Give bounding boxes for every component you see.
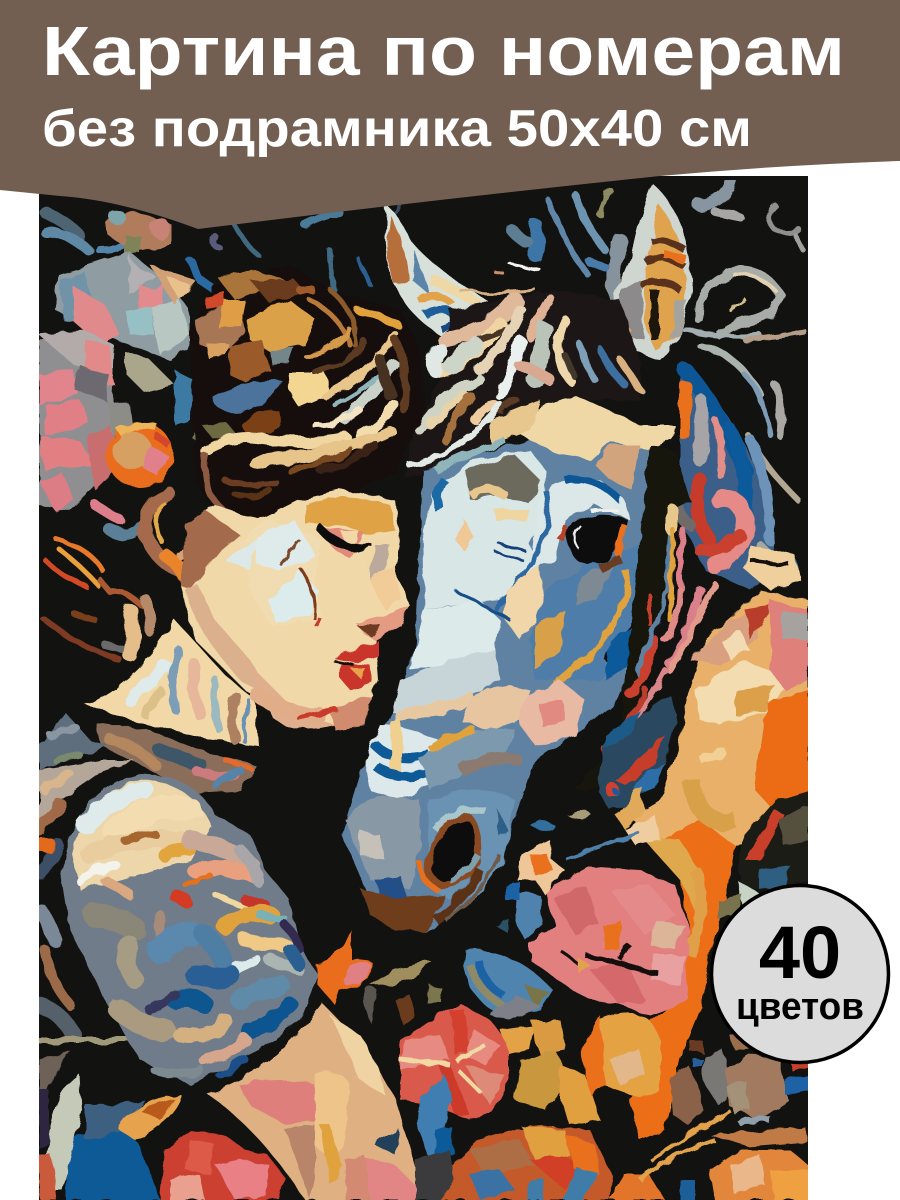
background foliage top xyxy=(45,180,805,500)
woman neck xyxy=(85,620,335,745)
woman face xyxy=(180,490,409,730)
lower right foliage xyxy=(640,1035,808,1200)
horse left ear xyxy=(386,205,487,335)
horse neck and harness xyxy=(600,446,799,752)
title banner xyxy=(0,0,900,229)
title line 1: Картина по номерам xyxy=(42,12,845,90)
horse neck dark strip xyxy=(597,695,677,810)
orange bud xyxy=(316,930,430,1025)
flower bottom left xyxy=(39,1050,285,1200)
horse head xyxy=(342,395,675,932)
woman shawl xyxy=(39,712,256,1040)
horse forelock xyxy=(405,290,640,480)
orange flower in hair xyxy=(107,422,173,488)
area under arm xyxy=(718,790,808,920)
dark rose left xyxy=(45,505,151,660)
small top flower xyxy=(105,210,172,255)
woman ear xyxy=(144,495,188,575)
badge caption: цветов xyxy=(736,986,864,1028)
top-left flower xyxy=(39,252,196,512)
woman forearm xyxy=(206,1003,430,1200)
woman hair xyxy=(190,265,425,520)
woman hand and arm xyxy=(615,545,808,1140)
pink flower xyxy=(530,867,690,1015)
horse right ear xyxy=(608,183,692,360)
small orange flower and leaves xyxy=(495,810,640,940)
woman shoulder xyxy=(62,773,318,1085)
blue shell leaf xyxy=(427,950,553,1015)
red flower and lower foliage xyxy=(400,995,730,1200)
title line 2: без подрамника 50х40 см xyxy=(42,100,752,158)
badge number: 40 xyxy=(759,911,841,994)
painting xyxy=(39,176,808,1200)
horse mane right xyxy=(675,365,775,590)
badge: 40 colours xyxy=(712,886,888,1062)
